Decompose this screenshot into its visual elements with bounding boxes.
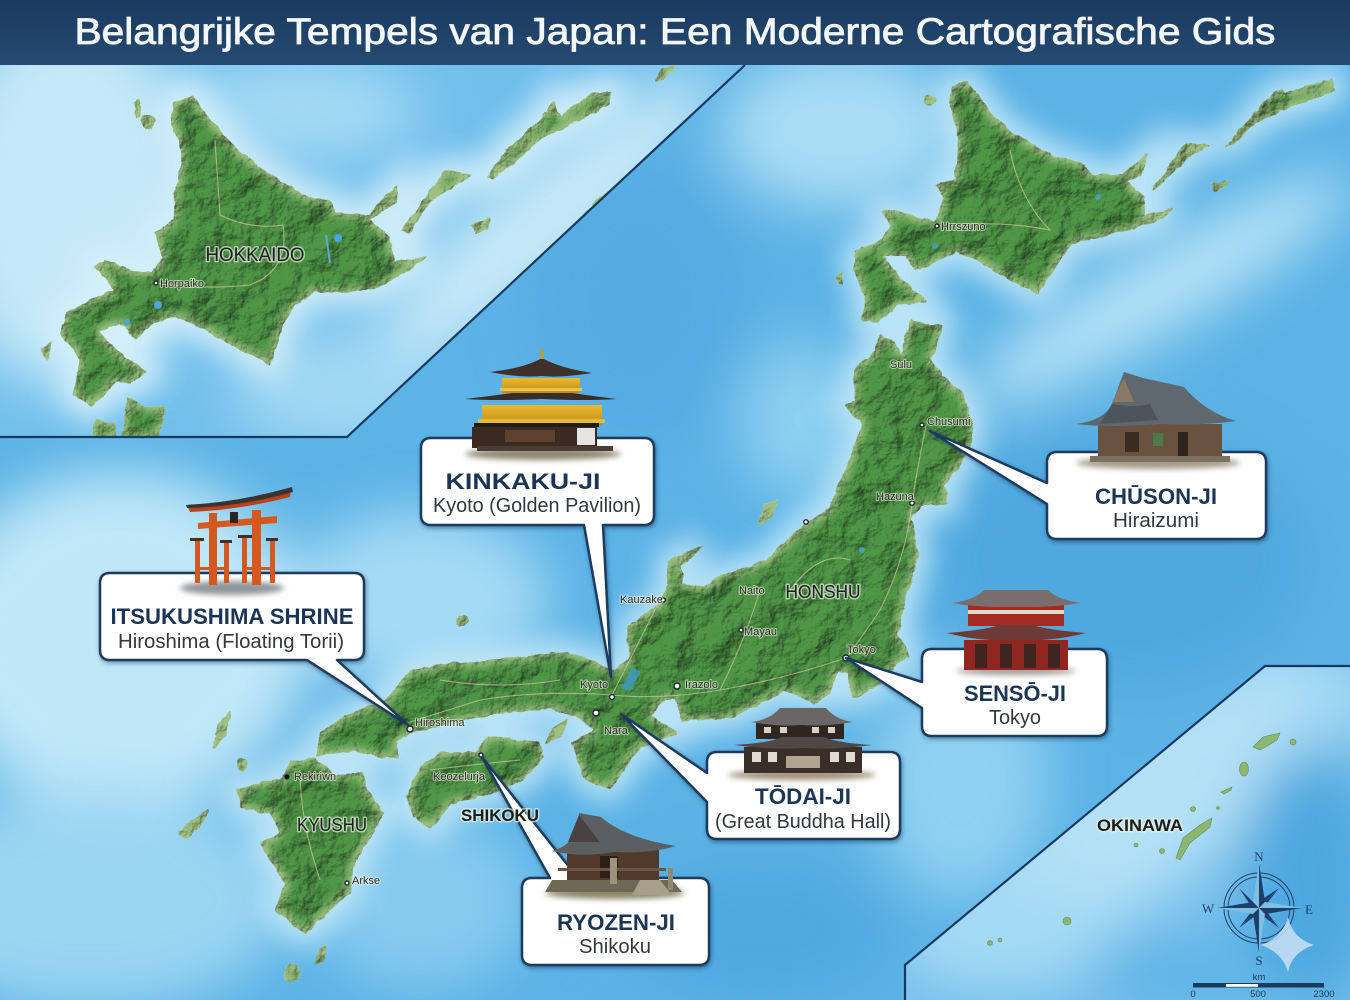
map: main Japan land masses [179, 79, 1334, 981]
land: inset Kuril islands [134, 65, 675, 233]
text: Kinkaku-ji title: KINKAKU-JI [446, 469, 600, 494]
text: Ryozen-ji title: RYOZEN-JI [557, 910, 675, 935]
text: Itsukushima title: ITSUKUSHIMA SHRINE [110, 604, 354, 629]
land: Shikoku [407, 737, 543, 828]
callout: Chuson-ji [930, 372, 1266, 539]
scale bar: 500 [1250, 989, 1266, 1000]
inset: Okinawa [906, 667, 1350, 1000]
header bar [0, 0, 1350, 65]
inset border: Hokkaido [0, 65, 745, 437]
inset: Hokkaido [0, 65, 738, 436]
city labels and markers: Nara [604, 725, 629, 737]
city labels and markers: Hazuna [876, 491, 915, 503]
city labels and markers: Arkse [352, 875, 380, 887]
land: inset Hokkaido main island [62, 96, 426, 407]
city labels and markers: Horpaiko [160, 278, 204, 290]
city labels and markers: Kauzake [620, 594, 663, 606]
callout: Kinkaku-ji [421, 349, 654, 677]
text: Ryozen-ji location: Shikoku [579, 936, 651, 958]
text: Kinkaku-ji location: Kyoto (Golden Pavilion) [433, 495, 641, 517]
land: Hokkaido [854, 82, 1172, 322]
callout: Ryozen-ji [482, 757, 709, 965]
city labels and markers: Sulu [890, 359, 912, 371]
callout: Todai-ji [621, 708, 900, 839]
text: Todai-ji title: TŌDAI-JI [755, 784, 851, 809]
inset border: Okinawa [905, 666, 1350, 1000]
city labels and markers: Irazolo [685, 679, 718, 691]
text: Senso-ji title: SENSŌ-JI [964, 681, 1066, 706]
scale bar [1190, 972, 1335, 1000]
city labels and markers: Mayau [744, 626, 777, 638]
city labels and markers: Rekiriwn [294, 771, 336, 783]
scale bar: km [1253, 972, 1265, 983]
text: Chuson-ji location: Hiraizumi [1113, 510, 1199, 532]
callout: Itsukushima Shrine [100, 487, 408, 725]
scale bar: 0 [1190, 989, 1196, 1000]
text: Senso-ji location: Tokyo [989, 707, 1041, 729]
icon: Ryozen-ji temple [545, 813, 685, 899]
text: Todai-ji location: (Great Buddha Hall) [715, 811, 891, 833]
city labels and markers: Hiroshima [415, 717, 465, 729]
icon: compass rose: N [1254, 849, 1264, 864]
city labels and markers: Naito [739, 585, 765, 597]
title: Belangrijke Tempels van Japan: Een Moderne Cartografische Gids [74, 11, 1276, 52]
label: Kyushu: KYUSHU [297, 815, 367, 835]
icon: compass rose: S [1255, 953, 1263, 968]
city labels and markers [154, 221, 986, 887]
city labels and markers: Tokyo [847, 644, 876, 656]
land: small islands [179, 95, 935, 981]
land: inset northern Honshu [42, 343, 165, 437]
map: roads and lakes on main map [300, 150, 1101, 880]
icon: sparkle watermark [1261, 917, 1314, 972]
city labels and markers: Hrrszuno [941, 221, 986, 233]
region labels [206, 245, 1183, 835]
callout: Senso-ji [846, 590, 1107, 736]
label: Shikoku: SHIKOKU [461, 806, 539, 825]
icon: Chuson-ji hall [1076, 372, 1240, 469]
land: Kuril islands [1153, 79, 1334, 190]
city labels and markers: Keozelurja [433, 771, 486, 783]
icon: floating torii gate [180, 487, 293, 595]
icon: compass rose [1202, 849, 1313, 968]
city labels and markers: Kyoto [580, 679, 608, 691]
land: Kyushu [237, 758, 383, 933]
city labels and markers: Chusumi [927, 416, 970, 428]
icon: Kinkaku-ji golden pavilion [465, 349, 621, 460]
text: Chuson-ji title: CHŪSON-JI [1095, 484, 1217, 509]
text: Itsukushima location: Hiroshima (Floating Torii) [118, 631, 344, 653]
land: Honshu [317, 320, 971, 788]
icon: compass rose: W [1202, 901, 1215, 916]
icon: Todai-ji great hall [728, 708, 876, 780]
label: Honshu: HONSHU [786, 582, 860, 602]
icon: compass rose: E [1305, 902, 1313, 917]
icon: Senso-ji temple gate [947, 590, 1086, 675]
label: Hokkaido: HOKKAIDO [206, 245, 304, 266]
land: Ryukyu islands [988, 733, 1296, 946]
scale bar: 2300 [1313, 989, 1335, 1000]
label: Okinawa: OKINAWA [1097, 816, 1183, 835]
